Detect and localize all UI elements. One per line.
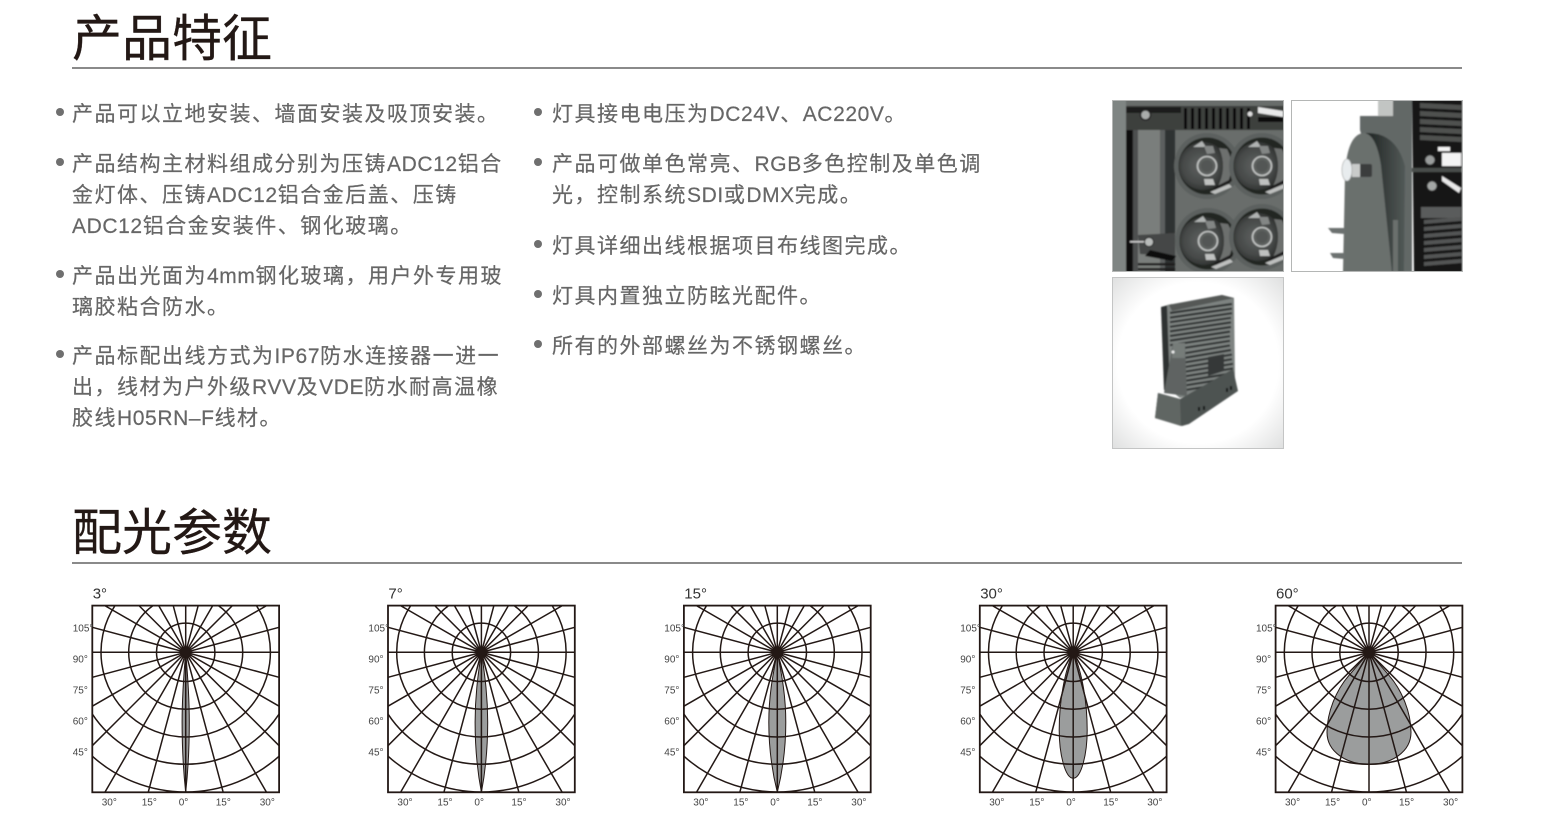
chart labels: 105° [73,623,93,634]
chart labels: 0° [179,797,188,808]
chart: 3 degree [73,585,279,808]
bullet: materials [56,152,503,238]
chart labels [368,585,571,808]
bullet: wiring: 灯具详细出线根据项目布线图完成。 [552,235,912,258]
bullet: materials: 金灯体、压铸ADC12铝合金后盖、压铸 [72,184,458,207]
chart labels: 15° [733,797,748,808]
chart labels: 60° [1276,585,1299,602]
chart labels: 105° [1256,623,1277,634]
chart labels: 15° [1399,797,1414,808]
lobe: 30 degree [1059,652,1087,778]
chart: 15 degree [664,585,871,808]
bullet: installation: 产品可以立地安装、墙面安装及吸顶安装。 [72,103,500,126]
bullet: materials: 产品结构主材料组成分别为压铸ADC12铝合 [72,153,503,176]
chart labels: 90° [73,654,88,665]
heading: product features: 产品特征 [72,11,272,67]
bullet: connector: 出，线材为户外级RVV及VDE防水耐高温橡 [72,376,499,399]
bullet: voltage: 灯具接电电压为DC24V、AC220V。 [552,103,907,126]
chart labels: 30° [555,797,571,808]
chart labels: 30° [693,797,708,808]
chart labels: 15° [807,797,822,808]
lobe: 15 degree [769,652,786,792]
chart labels: 30° [102,797,117,808]
chart labels: 90° [960,654,975,665]
chart labels: 30° [851,797,866,808]
chart: 7 degree [368,585,575,808]
chart labels: 15° [216,797,231,808]
chart labels: 15° [437,797,453,808]
chart labels: 45° [960,747,975,758]
photo: mounting bracket close-up [1291,100,1463,272]
bullet: control [534,152,982,207]
chart labels: 7° [388,585,403,602]
chart labels: 15° [142,797,157,808]
chart labels: 75° [1256,685,1271,696]
chart labels: 0° [1362,797,1372,808]
text column: features right [534,103,982,358]
bullet: glass: 璃胶粘合防水。 [72,296,230,319]
chart labels: 75° [664,685,679,696]
chart labels: 15° [684,585,707,602]
bullet: connector: 产品标配出线方式为IP67防水连接器一进一 [72,345,500,368]
polar grid [92,606,279,792]
chart labels: 105° [960,623,981,634]
chart labels [664,585,866,808]
chart labels: 60° [960,716,975,727]
chart labels: 15° [1103,797,1118,808]
chart labels: 15° [1029,797,1044,808]
chart labels: 30° [980,585,1003,602]
chart labels: 30° [1443,797,1458,808]
chart: 30 degree [960,585,1167,808]
chart labels: 75° [960,685,975,696]
bullet: glass [56,264,503,319]
polar grid [980,606,1167,792]
heading: light distribution: 配光参数 [72,505,272,561]
lobe: 3 degree [182,652,189,792]
polar grid [388,606,575,792]
chart labels: 45° [1256,747,1271,758]
chart labels: 0° [474,797,484,808]
bullet: anti-glare: 灯具内置独立防眩光配件。 [552,285,822,308]
chart labels: 15° [1325,797,1340,808]
lobe: 60 degree [1327,652,1411,764]
bullet: materials: ADC12铝合金安装件、钢化玻璃。 [72,215,413,238]
text column: features left [56,102,503,430]
bullet: screws: 所有的外部螺丝为不锈钢螺丝。 [552,335,867,358]
chart labels: 30° [989,797,1004,808]
chart labels: 45° [73,747,88,758]
chart labels: 3° [93,585,107,602]
chart labels: 15° [511,797,527,808]
chart labels: 30° [397,797,413,808]
chart labels [73,585,275,808]
bullet: control: 光，控制系统SDI或DMX完成。 [552,184,862,207]
chart: 60 degree [1256,585,1462,808]
chart labels: 30° [260,797,275,808]
polar grid [1276,606,1462,792]
bullet: control: 产品可做单色常亮、RGB多色控制及单色调 [552,153,982,176]
chart labels: 45° [664,747,679,758]
photo: whole fixture rear view [1112,277,1284,449]
chart labels: 90° [368,654,384,665]
photo: lens close-up [1112,100,1284,272]
chart labels: 60° [664,716,679,727]
chart labels: 0° [1066,797,1076,808]
chart labels: 75° [368,685,384,696]
chart labels [1256,585,1458,808]
chart labels: 75° [73,685,88,696]
chart labels: 90° [1256,654,1271,665]
chart labels: 105° [664,623,685,634]
polar grid [684,606,871,792]
bullet: glass: 产品出光面为4mm钢化玻璃，用户外专用玻 [72,265,503,288]
chart labels: 60° [368,716,384,727]
chart labels: 30° [1285,797,1300,808]
chart labels: 30° [1147,797,1162,808]
chart labels: 105° [368,623,389,634]
chart labels: 90° [664,654,679,665]
chart labels: 60° [1256,716,1271,727]
polar charts [72,585,1464,808]
chart labels: 60° [73,716,88,727]
chart labels: 0° [770,797,780,808]
chart labels: 45° [368,747,384,758]
chart labels [960,585,1162,808]
bullet: connector [56,344,500,430]
lobe: 7 degree [475,652,488,792]
bullet: connector: 胶线H05RN–F线材。 [72,407,282,430]
